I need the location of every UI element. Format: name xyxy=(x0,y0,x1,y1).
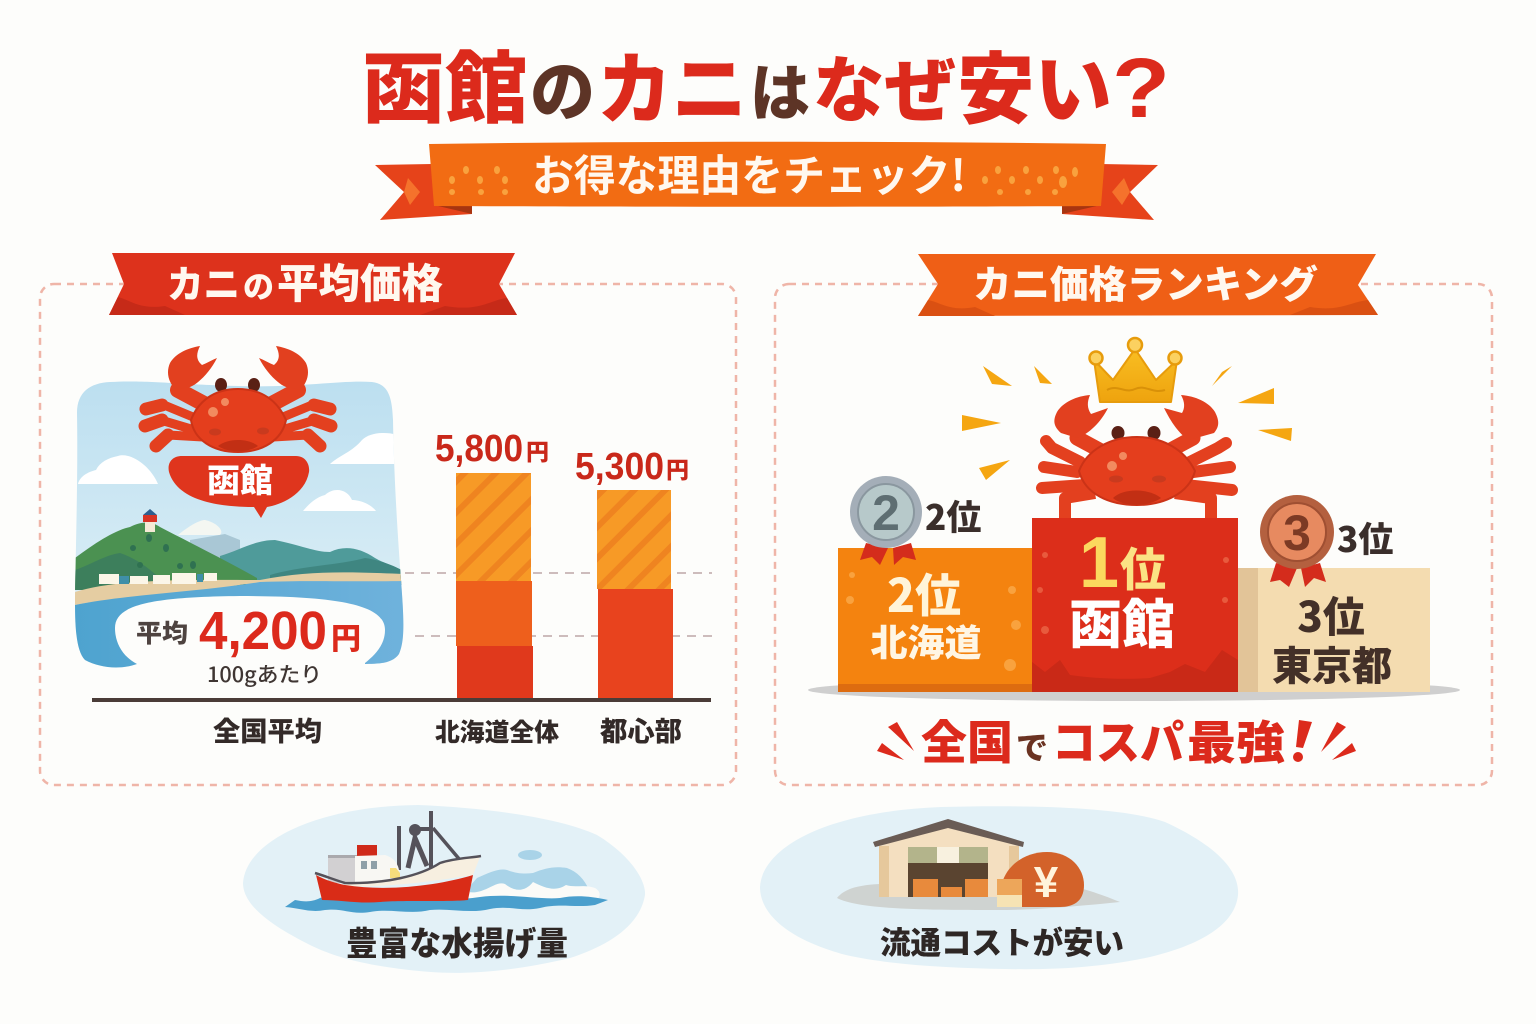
callout: best value nationwide: 全国 xyxy=(921,707,1013,773)
price bubble: 円 xyxy=(331,614,361,658)
bar: central Tokyo xyxy=(575,446,689,698)
price bubble: 100gあたり xyxy=(207,659,322,689)
caption: low distribution cost: 流通コストが安い xyxy=(880,918,1124,963)
icon: fishing boat xyxy=(285,811,608,913)
title xyxy=(362,27,1170,140)
icon: warehouse and yen bag: ¥ xyxy=(1034,858,1059,907)
panel: low distribution cost xyxy=(760,806,1238,969)
title: カニ xyxy=(597,28,747,140)
bubble: Hakodate label: 函館 xyxy=(207,454,273,502)
podium shadow xyxy=(808,679,1460,701)
panel: average price xyxy=(40,250,1492,973)
podium: 2nd xyxy=(838,548,1032,692)
icon: crown xyxy=(1090,338,1182,402)
title: 函館 xyxy=(362,27,528,139)
bar: central Tokyo: 5,300 xyxy=(575,446,664,488)
callout: best value nationwide: 最強 xyxy=(1187,707,1285,773)
axis labels: 北海道全体 xyxy=(435,713,559,749)
axis labels: 都心部 xyxy=(600,710,682,749)
bar: Hokkaido xyxy=(435,428,549,698)
title: 安い xyxy=(957,28,1112,140)
icon: champion crab xyxy=(1042,395,1232,518)
icon: bronze medal xyxy=(1260,495,1393,587)
podium: 2nd: 北海道 xyxy=(870,613,982,667)
heading ribbon: average price: の xyxy=(243,262,274,307)
callout: best value nationwide xyxy=(877,707,1356,773)
bubble: Hakodate label xyxy=(169,454,309,518)
podium: 1st: 位 xyxy=(1120,534,1166,600)
podium: 3rd: 3位 xyxy=(1297,584,1365,645)
panel: ranking xyxy=(775,254,1492,785)
price bubble: 4,200 xyxy=(199,601,327,661)
icon: warehouse and yen bag xyxy=(837,819,1120,910)
bar: central Tokyo: 円 xyxy=(666,451,689,485)
podium: 3rd xyxy=(1238,568,1430,692)
axis baseline xyxy=(92,698,711,702)
podium: 1st xyxy=(1032,518,1238,692)
title: は xyxy=(750,43,810,133)
heading ribbon: average price xyxy=(109,250,517,315)
bar: Hokkaido: 円 xyxy=(526,433,549,467)
icon: silver medal xyxy=(850,476,981,565)
price bubble: 平均 xyxy=(136,614,188,650)
axis labels: 全国平均 xyxy=(213,710,322,749)
label: 3rd rank: 3位 xyxy=(1337,512,1393,563)
callout: best value nationwide: コスパ xyxy=(1052,707,1184,773)
axis labels xyxy=(213,710,682,749)
icon: crab xyxy=(145,346,331,452)
icon: silver medal: 2 xyxy=(872,485,900,541)
panel: abundant catch xyxy=(243,805,645,973)
icon: bronze medal: 3 xyxy=(1283,505,1311,561)
bar: Hokkaido: 5,800 xyxy=(435,428,523,470)
podium: 1st: 1 xyxy=(1079,523,1119,603)
price bubble xyxy=(115,596,385,690)
heading ribbon: ranking xyxy=(918,254,1378,316)
illustration: Hakodate scene xyxy=(75,346,405,690)
title: の xyxy=(530,39,595,135)
title: ? xyxy=(1112,41,1170,135)
podium: 2nd: 2位 xyxy=(887,560,961,626)
heading ribbon: ranking: カニ価格ランキング xyxy=(973,254,1318,309)
callout: best value nationwide: で xyxy=(1016,723,1048,769)
heading ribbon: average price: 平均価格 xyxy=(277,250,443,310)
label: 2nd rank: 2位 xyxy=(925,490,981,541)
podium: 1st: 函館 xyxy=(1069,583,1175,659)
podium: 3rd: 東京都 xyxy=(1272,634,1392,692)
top ribbon banner xyxy=(375,142,1158,220)
icon: burst rays xyxy=(962,366,1292,480)
heading ribbon: average price: カニ xyxy=(167,254,240,309)
bar chart xyxy=(92,428,712,749)
caption: abundant catch: 豊富な水揚げ量 xyxy=(346,917,568,965)
title: なぜ xyxy=(813,32,956,137)
banner text: お得な理由をチェック! xyxy=(532,142,966,204)
